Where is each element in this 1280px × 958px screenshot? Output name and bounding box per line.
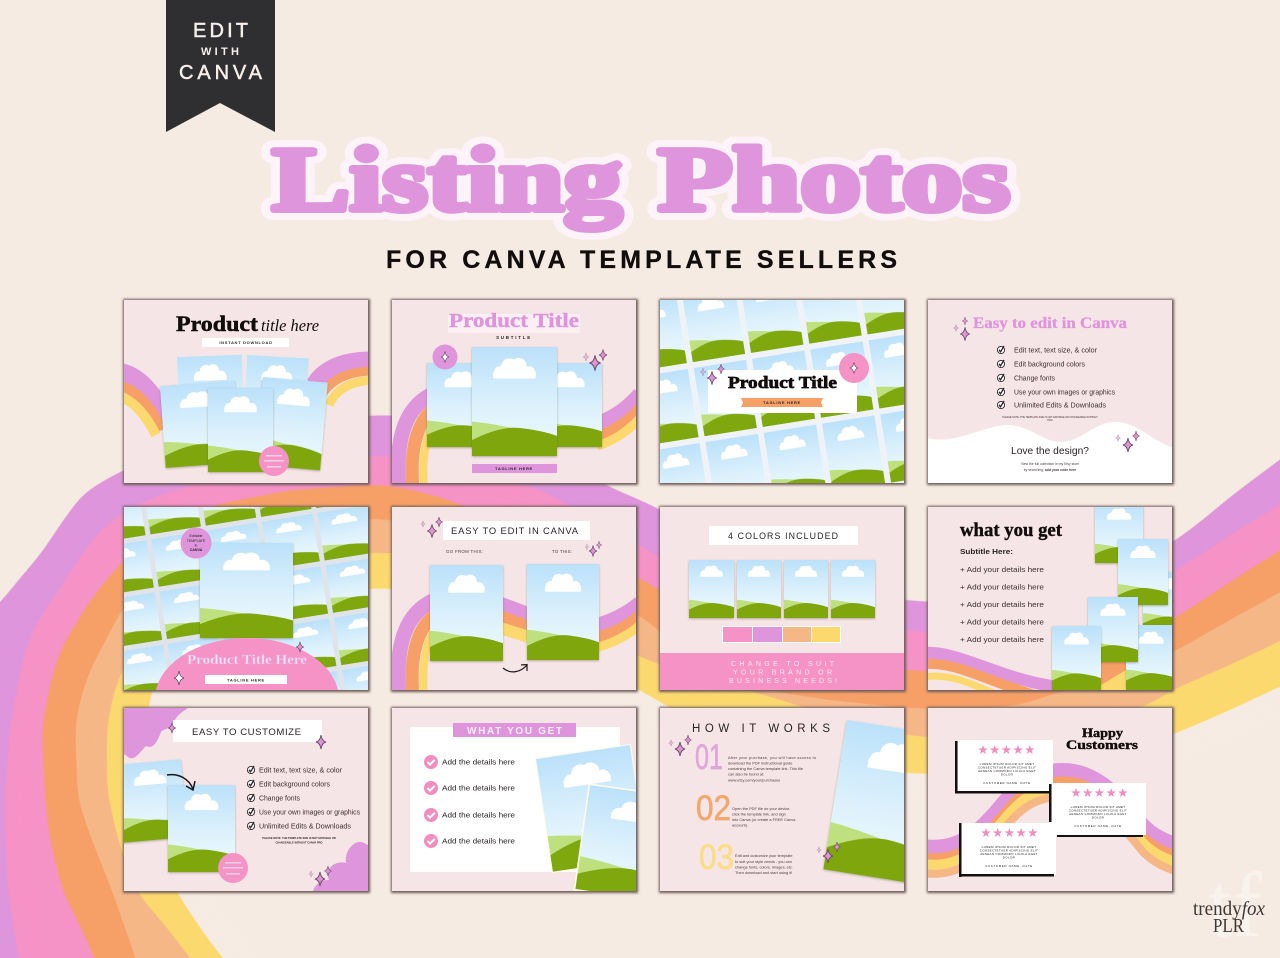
centre photo xyxy=(208,388,273,472)
product title: Product Title Here xyxy=(187,652,307,667)
step 2: into Canva (or create a FREE Canva xyxy=(732,817,796,822)
labels xyxy=(446,549,572,554)
checklist: Edit background colors xyxy=(1014,362,1085,368)
checklist: Change fonts xyxy=(1014,376,1055,382)
step 3 xyxy=(699,838,793,877)
four photos xyxy=(689,560,875,618)
step 2: account). xyxy=(732,822,748,828)
photo xyxy=(823,720,956,886)
checklist xyxy=(997,346,1115,410)
pink badge xyxy=(839,353,869,383)
checklist: Use your own images or graphics xyxy=(1014,390,1115,396)
panel: slide 10 what you get checklist xyxy=(391,707,691,905)
review card 1: LOREM IPSUM DOLOR SIT AMET xyxy=(980,762,1034,766)
title: listing photos: Photos xyxy=(658,129,1010,230)
title bar: 4 COLORS INCLUDED xyxy=(728,531,838,541)
logo: trendyfox PLR: tf xyxy=(1208,854,1262,956)
review card 2: CUSTOMER NAME, DATE xyxy=(1074,824,1122,828)
step 3: change fonts, colors, images, etc. xyxy=(735,864,793,870)
change text: BUSINESS NEEDS! xyxy=(729,678,837,685)
sparkles xyxy=(174,642,304,685)
step 2: click the template link, and sign xyxy=(732,812,786,816)
heading xyxy=(176,311,319,336)
tagline bar xyxy=(472,464,557,473)
note: PRO xyxy=(1047,419,1053,422)
tiled photos xyxy=(124,507,368,690)
curved arrow xyxy=(167,775,195,790)
tiled photos xyxy=(660,300,904,483)
love the design: Love the design? xyxy=(1011,445,1089,457)
checked details: Add the details here xyxy=(442,810,515,820)
review card 2: DOLOR xyxy=(1092,816,1105,820)
subtitle: SUBTITLE xyxy=(496,335,532,340)
ribbon badge: edit with canva: EDIT xyxy=(193,20,248,42)
rainbow xyxy=(923,653,1058,704)
sparkles xyxy=(700,364,724,385)
panel: slide 11 how it works xyxy=(659,707,956,893)
note: CHANGEABLE WITHOUT CANVA PRO xyxy=(275,840,323,844)
step 1 xyxy=(695,738,816,782)
review card 3 xyxy=(959,823,1056,877)
review card 1 xyxy=(955,740,1053,794)
right photo xyxy=(532,363,602,447)
step 1: After your purchase, you will have access to xyxy=(728,755,816,760)
details list xyxy=(960,565,1044,644)
title bar xyxy=(443,521,590,540)
sparkles xyxy=(583,349,607,371)
download strip: INSTANT DOWNLOAD xyxy=(219,340,273,345)
ribbon badge: edit with canva: CANVA xyxy=(179,62,263,84)
rainbow band xyxy=(398,599,640,697)
title: listing photos: Listing xyxy=(272,129,622,230)
colour swatches xyxy=(722,626,841,643)
tagline bar: TAGLINE HERE xyxy=(495,466,533,471)
checklist xyxy=(247,766,360,830)
tagline bar: TAGLINE HERE xyxy=(227,678,265,682)
panel: slide 9 easy to customize xyxy=(116,707,370,893)
heading xyxy=(1066,726,1138,752)
details list: + Add your details here xyxy=(960,600,1044,609)
front left photo xyxy=(160,381,241,468)
review card 1: DOLOR xyxy=(1001,772,1014,776)
panel: slide 1 product title collage xyxy=(120,299,372,485)
checklist: Use your own images or graphics xyxy=(259,810,360,816)
review card 1: CONSECTETUER ADIPISCING ELIT xyxy=(978,766,1036,770)
review card 3: AENEAN COMMODO LIGULA EGET xyxy=(980,852,1038,856)
review card 2: LOREM IPSUM DOLOR SIT AMET xyxy=(1071,805,1125,809)
checklist: Unlimited Edits & Downloads xyxy=(1014,402,1107,410)
pink badge xyxy=(259,446,289,476)
sparkles lower xyxy=(1116,431,1140,452)
store text: by searching: add your code here xyxy=(1024,468,1076,472)
checklist: Edit text, text size, & color xyxy=(1014,348,1098,354)
title bar xyxy=(173,720,322,742)
step 3: to suit your style needs - you can xyxy=(735,859,792,864)
heading: Happy xyxy=(1082,726,1124,740)
step 3: Then download and start using it! xyxy=(735,870,792,875)
store text: View the full collection in my Etsy store xyxy=(1021,462,1079,466)
title: listing photos xyxy=(272,129,1010,230)
purple badge: CANVA xyxy=(190,548,203,552)
review card 2: CONSECTETUER ADIPISCING ELIT xyxy=(1069,808,1127,812)
arrow xyxy=(503,664,527,672)
step 2: Open the PDF file on your device, xyxy=(732,806,790,811)
store text xyxy=(1021,462,1079,472)
white panel xyxy=(410,727,620,872)
wavy rainbow xyxy=(923,770,1178,874)
centre photo xyxy=(168,785,235,872)
panel: slide 3 tiled product title xyxy=(659,299,906,485)
step 3: Edit and customize your template xyxy=(735,853,793,858)
sparkles xyxy=(954,317,970,341)
details list: + Add your details here xyxy=(960,635,1044,644)
sparkles xyxy=(168,723,332,886)
details list: + Add your details here xyxy=(960,565,1044,574)
title: listing photos: Photos xyxy=(658,129,1010,230)
left rainbow arc xyxy=(120,372,168,435)
purple blob bottom right xyxy=(313,842,368,891)
pink band xyxy=(660,653,904,690)
change text: YOUR BRAND OR xyxy=(733,670,832,676)
photo stack xyxy=(1052,502,1193,690)
back photos xyxy=(177,355,309,443)
title bar xyxy=(709,526,858,545)
purple badge: in xyxy=(195,544,197,548)
review card 2 xyxy=(1049,783,1146,837)
title bar: EASY TO EDIT IN CANVA xyxy=(451,525,579,536)
review card 3: DOLOR xyxy=(1003,856,1016,860)
checklist: Change fonts xyxy=(259,796,300,802)
right rainbow arc xyxy=(597,394,640,446)
ribbon badge: edit with canva: WITH xyxy=(201,46,239,58)
checklist: Edit background colors xyxy=(259,782,330,788)
step 1: containing the Canva template link. This file xyxy=(728,766,803,771)
title card xyxy=(708,370,857,413)
logo: trendyfox PLR: trendyfox xyxy=(1193,898,1265,920)
heading: Customers xyxy=(1066,738,1138,752)
step 2: 02 xyxy=(696,789,731,828)
step 1: can also be found at: xyxy=(728,772,764,776)
labels: GO FROM THIS: xyxy=(446,549,483,554)
purple badge xyxy=(180,528,212,558)
before photo xyxy=(430,565,503,661)
pink hill xyxy=(155,638,339,760)
checklist: Edit text, text size, & color xyxy=(259,768,343,774)
note xyxy=(262,836,336,844)
checked details: Add the details here xyxy=(442,758,515,766)
checked details: Add the details here xyxy=(442,836,515,846)
step 2 xyxy=(696,789,796,828)
rainbow gap xyxy=(1101,662,1126,690)
pink badge xyxy=(218,853,248,883)
centre photo xyxy=(200,543,293,638)
panel: slide 5 tiled title here xyxy=(123,506,370,760)
purple badge xyxy=(432,344,458,370)
sparkles xyxy=(669,735,840,863)
review card 3: CUSTOMER NAME, DATE xyxy=(985,864,1033,868)
note: PLEASE NOTE: THE TEMPLATE SIZE IS NOT EDITABLE OR CHANGEABLE WITHOUT xyxy=(1002,416,1098,419)
download strip xyxy=(202,338,289,347)
subtitle: Subtitle Here: xyxy=(960,547,1013,556)
left rainbow arc xyxy=(398,392,442,490)
step 1: 01 xyxy=(695,738,723,777)
step 1: www.etsy.com/your/purchases xyxy=(728,778,780,782)
note: PLEASE NOTE: THE TEMPLATE SIZE IS NOT EDITABLE OR xyxy=(262,836,336,840)
header bar xyxy=(453,723,576,737)
review card 1: AENEAN COMMODO LIGULA EGET xyxy=(978,769,1036,773)
title: listing photos: Listing xyxy=(272,129,622,230)
panel: slide 2 product title trio xyxy=(391,299,640,490)
panel: slide 8 what you get list xyxy=(923,502,1193,704)
white wave xyxy=(928,422,1172,483)
checked details: Add the details here xyxy=(442,784,515,792)
heading: Easy to edit in Canva xyxy=(973,315,1127,332)
centre photo xyxy=(472,347,557,456)
ribbon tagline xyxy=(741,398,823,407)
review card 3: LOREM IPSUM DOLOR SIT AMET xyxy=(982,845,1036,849)
right rainbow arc xyxy=(310,360,372,405)
after photo xyxy=(527,564,599,660)
step 1: download the PDF instructional guide xyxy=(728,760,792,766)
ribbon badge: edit with canva xyxy=(166,0,275,132)
ribbon tagline: TAGLINE HERE xyxy=(763,400,801,405)
background rainbow xyxy=(0,415,1280,958)
change text: CHANGE TO SUIT xyxy=(731,661,835,668)
subtitle: FOR CANVA TEMPLATE SELLERS xyxy=(386,246,897,274)
review card 3: CONSECTETUER ADIPISCING ELIT xyxy=(980,848,1038,852)
tagline bar xyxy=(205,675,287,684)
title bar: EASY TO CUSTOMIZE xyxy=(192,727,301,738)
panel: slide 7 four colours xyxy=(659,506,906,692)
heading: Product Title xyxy=(449,310,579,332)
note xyxy=(1002,416,1098,422)
change text xyxy=(729,661,837,685)
panel: slide 12 happy customers xyxy=(923,707,1178,893)
sparkles xyxy=(421,517,602,557)
purple badge: TEMPLATE xyxy=(187,539,206,543)
labels: TO THIS: xyxy=(552,549,572,554)
review card 2: AENEAN COMMODO LIGULA EGET xyxy=(1069,812,1127,816)
purple badge: Editable xyxy=(190,534,202,538)
checked details xyxy=(424,755,515,848)
heading: title here xyxy=(261,316,319,335)
product title: Product Title xyxy=(728,373,838,392)
heading: Product xyxy=(176,311,259,336)
purple blob top left xyxy=(124,708,188,758)
heading: what you get xyxy=(960,520,1063,541)
left photo xyxy=(116,759,188,843)
left photo xyxy=(427,363,497,447)
panel: slide 6 before and after xyxy=(391,506,640,697)
details list: + Add your details here xyxy=(960,582,1044,592)
front right photo xyxy=(255,377,328,470)
review card 1: CUSTOMER NAME, DATE xyxy=(983,781,1031,785)
panel: slide 4 easy to edit xyxy=(927,299,1174,485)
heading: HOW IT WORKS xyxy=(692,723,830,735)
back photo xyxy=(535,744,648,873)
checklist: Unlimited Edits & Downloads xyxy=(259,824,352,830)
details list: + Add your details here xyxy=(960,618,1044,626)
front photo xyxy=(574,783,691,905)
logo: trendyfox PLR: PLR xyxy=(1213,915,1245,937)
step 3: 03 xyxy=(699,838,734,877)
header bar: WHAT YOU GET xyxy=(467,726,562,737)
